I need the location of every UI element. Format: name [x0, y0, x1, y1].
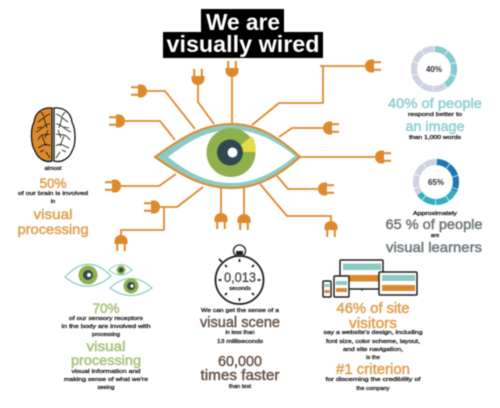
70% statistic text: in the body are involved with [62, 324, 150, 330]
brain statistic text: in [51, 199, 55, 205]
65% statistic text: Approximately [413, 211, 457, 217]
70% statistic text: 70% [92, 301, 120, 316]
gauge 40% [414, 49, 454, 89]
70% statistic text: processing [71, 352, 141, 368]
brain statistic text: 50% [39, 176, 67, 191]
three eyes icon [65, 264, 152, 296]
40% statistic text: 40% of people [388, 95, 482, 111]
46% statistic text: the company [356, 386, 390, 392]
46% statistic text: visitors [349, 315, 397, 332]
stopwatch icon: 0,013 [224, 270, 256, 285]
70% statistic text [62, 301, 150, 391]
40% statistic text [388, 95, 482, 141]
70% statistic text: visual [86, 338, 126, 354]
gauge 40%: 40% [426, 65, 442, 74]
gauge 65% [416, 162, 456, 202]
46% statistic text: for discerning the credibility of [326, 377, 421, 383]
visual scene statistic text: in less than [225, 330, 255, 336]
65% statistic text: 65 % of people [386, 216, 483, 232]
70% statistic text: processing [92, 332, 120, 338]
40% statistic text: than 1,000 words [409, 135, 461, 141]
title: We are [206, 9, 280, 35]
visual scene statistic text: than text [229, 384, 252, 390]
visual scene statistic text: times faster [200, 368, 280, 384]
stopwatch icon: seconds [229, 286, 251, 292]
wires and plugs [105, 60, 391, 251]
brain icon [31, 108, 75, 162]
46% statistic text: #1 criterion [336, 361, 410, 378]
visual scene statistic text: 60,000 [218, 354, 262, 370]
70% statistic text: of our sensory receptors [69, 316, 143, 322]
65% statistic text [386, 211, 483, 255]
65% statistic text: are [431, 233, 439, 239]
46% statistic text: font size, color scheme, layout, [326, 339, 420, 345]
65% statistic text: visual learners [386, 239, 482, 255]
40% statistic text: an image [406, 118, 465, 134]
brain statistic text [18, 166, 88, 237]
46% statistic text: say a website's design, including [324, 330, 422, 336]
brain statistic text: almost [44, 166, 62, 172]
devices icon [323, 260, 417, 297]
title: visually wired [166, 31, 320, 57]
46% statistic text: and site navigation, [343, 347, 403, 353]
46% statistic text: 46% of site [336, 300, 410, 317]
70% statistic text: visual information and [72, 369, 140, 375]
gauge 65%: 65% [428, 178, 444, 187]
70% statistic text: making sense of what we're [64, 377, 148, 383]
brain statistic text: of our brain is involved [18, 191, 88, 197]
visual scene statistic text: We can get the sense of a [201, 308, 280, 314]
46% statistic text: is the [366, 355, 380, 361]
70% statistic text: seeing [97, 385, 115, 391]
stopwatch icon [216, 245, 264, 304]
46% statistic text [324, 300, 422, 392]
visual scene statistic text [200, 308, 280, 390]
brain statistic text: visual [34, 206, 72, 222]
visual scene statistic text: 13 milliseconds [217, 339, 263, 345]
central eye [155, 124, 300, 188]
title [163, 9, 323, 58]
visual scene statistic text: visual scene [200, 315, 280, 331]
brain statistic text: processing [18, 221, 88, 237]
40% statistic text: respond better to [408, 112, 462, 118]
